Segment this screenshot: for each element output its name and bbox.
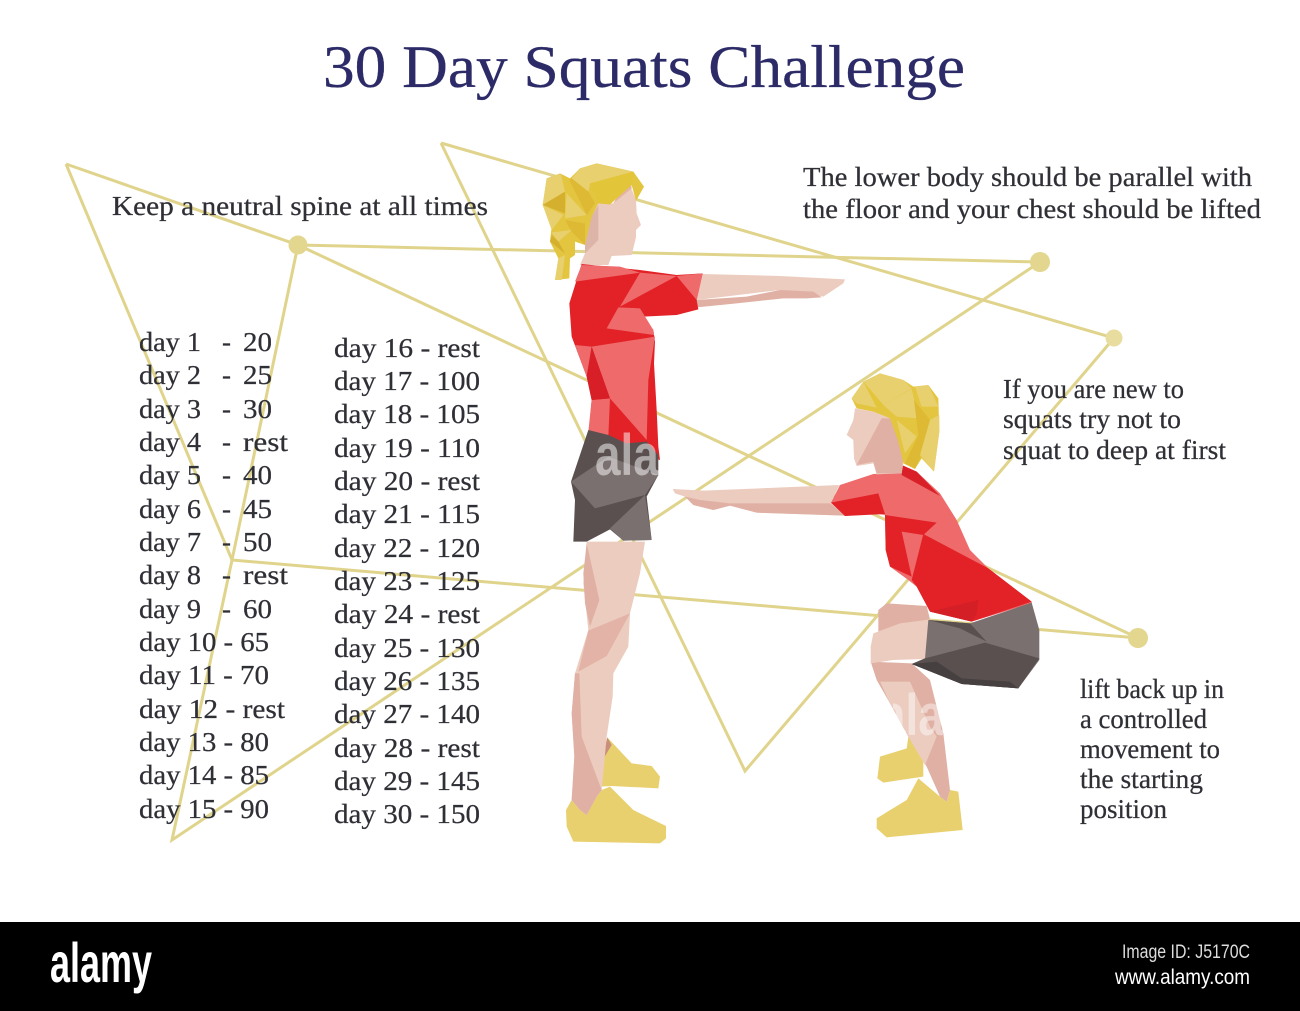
schedule column: days 1 to 15: -: [222, 527, 231, 557]
schedule column: days 1 to 15: day 13 - 80: [139, 727, 269, 757]
schedule column: days 16 to 30: day 21 - 115: [334, 499, 480, 529]
tip: new to squats: squat to deep at first: [1003, 435, 1226, 465]
standing legs and shoes: [566, 542, 666, 843]
title: 30 Day Squats Challenge: [323, 34, 965, 100]
schedule column: days 1 to 15: -: [222, 394, 231, 424]
schedule column: days 16 to 30: day 18 - 105: [334, 399, 480, 429]
watermark on shin: alamy: [880, 683, 1010, 748]
schedule column: days 1 to 15: -: [222, 560, 231, 590]
schedule column: days 1 to 15: -: [222, 460, 231, 490]
schedule column: days 16 to 30: day 17 - 100: [334, 366, 480, 396]
schedule column: days 1 to 15: day 7: [139, 527, 201, 557]
schedule column: days 16 to 30: day 20 - rest: [334, 466, 481, 496]
schedule column: days 1 to 15: 50: [243, 527, 272, 557]
schedule column: days 16 to 30: day 22 - 120: [334, 533, 480, 563]
schedule column: days 1 to 15: day 10 - 65: [139, 627, 269, 657]
schedule column: days 1 to 15: -: [222, 327, 231, 357]
schedule column: days 16 to 30: day 26 - 135: [334, 666, 480, 696]
schedule column: days 1 to 15: day 2: [139, 360, 201, 390]
schedule column: days 1 to 15: day 3: [139, 394, 201, 424]
tip: lower body parallel: The lower body should be parallel with: [803, 162, 1253, 192]
tip: new to squats: [1003, 374, 1226, 465]
schedule column: days 1 to 15: day 12 - rest: [139, 694, 286, 724]
schedule column: days 16 to 30: [334, 333, 481, 829]
tip: neutral spine: Keep a neutral spine at all times: [112, 191, 488, 221]
tip: lower body parallel: [803, 162, 1262, 224]
standing head, arm, shirt and shorts: [569, 175, 845, 542]
schedule column: days 1 to 15: 30: [243, 394, 272, 424]
tip: new to squats: If you are new to: [1003, 374, 1184, 404]
schedule column: days 16 to 30: day 25 - 130: [334, 633, 480, 663]
connector node: lift back up: [1128, 628, 1148, 648]
tip: lower body parallel: the floor and your chest should be lifted: [803, 194, 1262, 224]
squat head and hair: [847, 373, 939, 474]
connector node: new to squats: [1106, 330, 1122, 346]
connector node: lower body: [1030, 252, 1050, 272]
schedule column: days 1 to 15: -: [222, 594, 231, 624]
tip: lift back up: a controlled: [1080, 704, 1207, 734]
tip: lift back up: [1080, 674, 1224, 824]
connector lines network: [66, 143, 1138, 840]
schedule column: days 1 to 15: day 6: [139, 494, 201, 524]
footer bar: [0, 922, 1300, 1011]
schedule column: days 1 to 15: day 11 - 70: [139, 660, 269, 690]
schedule column: days 16 to 30: day 27 - 140: [334, 699, 480, 729]
schedule column: days 1 to 15: day 14 - 85: [139, 760, 269, 790]
figure: squatting woman: [673, 373, 1039, 837]
schedule column: days 16 to 30: day 30 - 150: [334, 799, 480, 829]
schedule column: days 1 to 15: day 8: [139, 560, 201, 590]
standing hair: [543, 163, 644, 280]
tip: lift back up: movement to: [1080, 734, 1220, 764]
schedule column: days 16 to 30: day 19 - 110: [334, 433, 480, 463]
schedule column: days 1 to 15: -: [222, 360, 231, 390]
tip: lift back up: the starting: [1080, 764, 1203, 794]
schedule column: days 1 to 15: [139, 327, 289, 824]
schedule column: days 1 to 15: day 1: [139, 327, 201, 357]
image id: Image ID: J5170C: [1122, 942, 1250, 963]
schedule column: days 1 to 15: -: [222, 494, 231, 524]
schedule column: days 1 to 15: day 4: [139, 427, 202, 457]
schedule column: days 1 to 15: 25: [243, 360, 272, 390]
watermark on shorts: alamy: [595, 423, 725, 488]
schedule column: days 1 to 15: rest: [243, 427, 289, 457]
schedule column: days 1 to 15: 40: [243, 460, 272, 490]
schedule column: days 16 to 30: day 24 - rest: [334, 599, 481, 629]
figure: standing woman: [543, 163, 845, 843]
squat shoes, legs, arm, shirt and shorts: [673, 465, 1039, 837]
schedule column: days 1 to 15: day 9: [139, 594, 201, 624]
schedule column: days 1 to 15: -: [222, 427, 231, 457]
connector node: neutral spine: [288, 236, 308, 254]
tip: lift back up: lift back up in: [1080, 674, 1224, 704]
schedule column: days 16 to 30: day 28 - rest: [334, 733, 481, 763]
schedule column: days 1 to 15: 20: [243, 327, 272, 357]
schedule column: days 1 to 15: day 5: [139, 460, 201, 490]
schedule column: days 1 to 15: 60: [243, 594, 272, 624]
schedule column: days 1 to 15: rest: [243, 560, 289, 590]
tip: new to squats: squats try not to: [1003, 404, 1181, 434]
schedule column: days 1 to 15: day 15 - 90: [139, 794, 269, 824]
schedule column: days 1 to 15: 45: [243, 494, 272, 524]
schedule column: days 16 to 30: day 29 - 145: [334, 766, 480, 796]
schedule column: days 16 to 30: day 23 - 125: [334, 566, 480, 596]
website: www.alamy.com: [1114, 966, 1250, 989]
tip: lift back up: position: [1080, 794, 1167, 824]
schedule column: days 16 to 30: day 16 - rest: [334, 333, 481, 363]
footer logo: alamy: [50, 931, 152, 994]
